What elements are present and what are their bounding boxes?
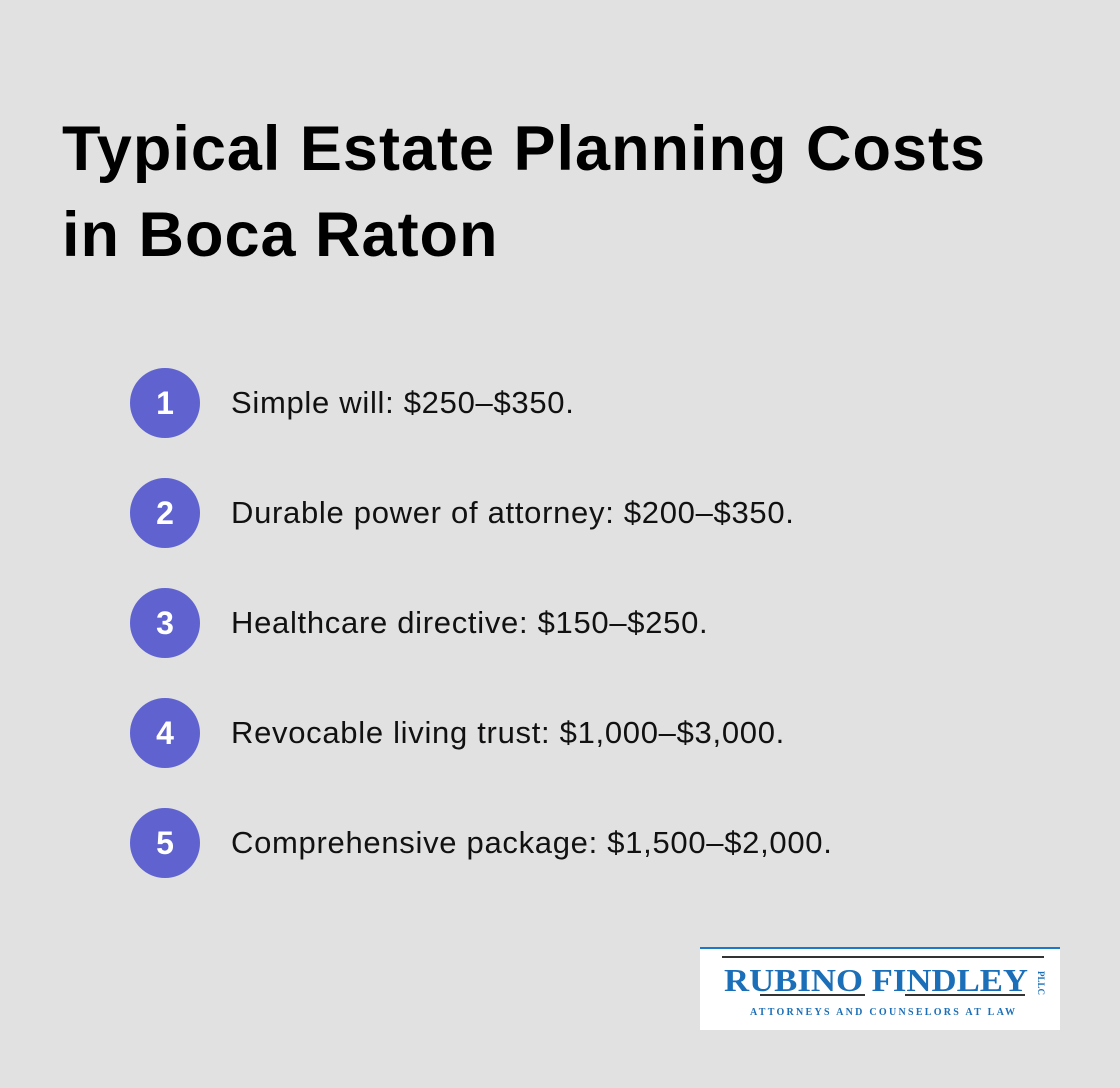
item 4: [130, 698, 785, 768]
logo: PLLC: [1036, 971, 1046, 995]
title: in Boca Raton: [62, 200, 499, 270]
item 5: 5: [156, 825, 174, 861]
item 2: Durable power of attorney: $200–$350.: [231, 495, 795, 530]
item 4: Revocable living trust: $1,000–$3,000.: [231, 715, 785, 750]
logo: [700, 947, 1060, 1030]
item 3: [130, 588, 708, 658]
item 2: 2: [156, 495, 174, 531]
item 2: [130, 478, 795, 548]
item 5: [130, 808, 833, 878]
title: [62, 114, 986, 270]
title: Typical Estate Planning Costs: [62, 114, 986, 184]
item 1: [130, 368, 575, 438]
item 4: 4: [156, 715, 174, 751]
logo: ATTORNEYS AND COUNSELORS AT LAW: [750, 1007, 1015, 1018]
item 1: 1: [156, 385, 174, 421]
item 3: 3: [156, 605, 174, 641]
logo: RUBINO FINDLEY: [724, 962, 1028, 998]
item 5: Comprehensive package: $1,500–$2,000.: [231, 825, 833, 860]
item 3: Healthcare directive: $150–$250.: [231, 605, 708, 640]
item 1: Simple will: $250–$350.: [231, 385, 575, 420]
